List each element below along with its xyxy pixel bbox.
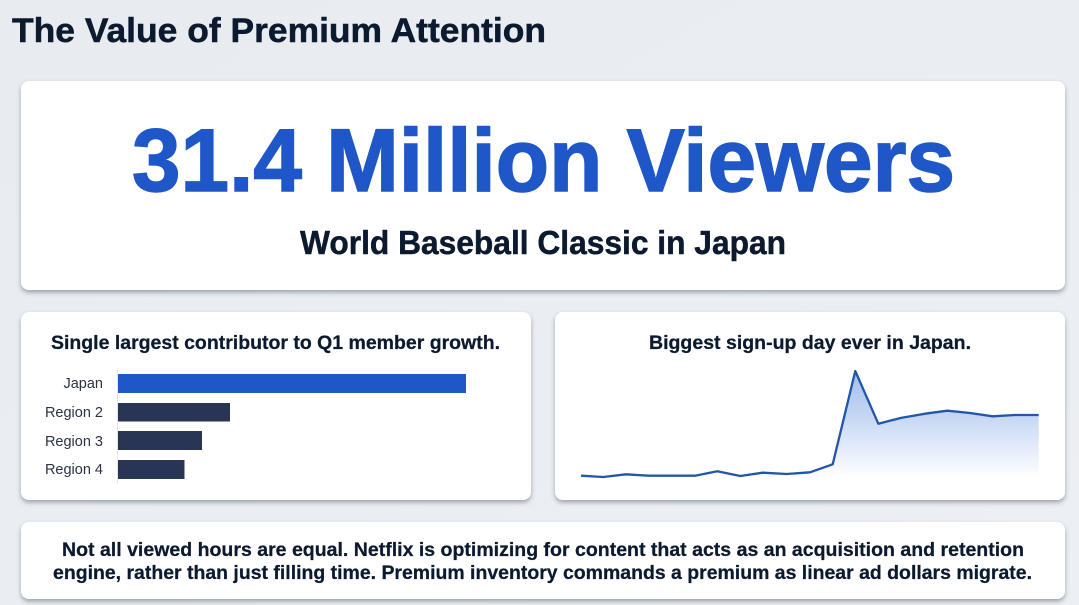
chart title: Single largest contributor to Q1 member growth. — [51, 332, 500, 354]
panel: takeaway — [21, 522, 1065, 599]
axis labels: Japan — [63, 376, 103, 392]
panel: headline stat — [21, 81, 1065, 290]
axis labels: Region 3 — [45, 434, 103, 450]
takeaway text: Not all viewed hours are equal. Netflix is optimizing for content that acts as an acquisition and retention — [62, 539, 1024, 561]
axis labels — [45, 376, 103, 478]
takeaway text — [53, 539, 1032, 584]
chart title: Biggest sign-up day ever in Japan. — [649, 332, 971, 354]
title: The Value of Premium Attention — [12, 12, 546, 50]
panel: sign-up line chart — [555, 312, 1065, 500]
axis labels: Region 4 — [45, 462, 103, 478]
area fill — [581, 371, 1039, 478]
trend line — [581, 371, 1039, 477]
takeaway text: engine, rather than just filling time. Premium inventory commands a premium as linear ad dollars migrate. — [53, 562, 1032, 584]
panel: member growth bar chart — [21, 312, 531, 500]
axis labels: Region 2 — [45, 405, 103, 421]
subheading: World Baseball Classic in Japan — [300, 224, 786, 261]
big number: 31.4 Million Viewers — [132, 110, 955, 210]
bars — [118, 374, 466, 479]
